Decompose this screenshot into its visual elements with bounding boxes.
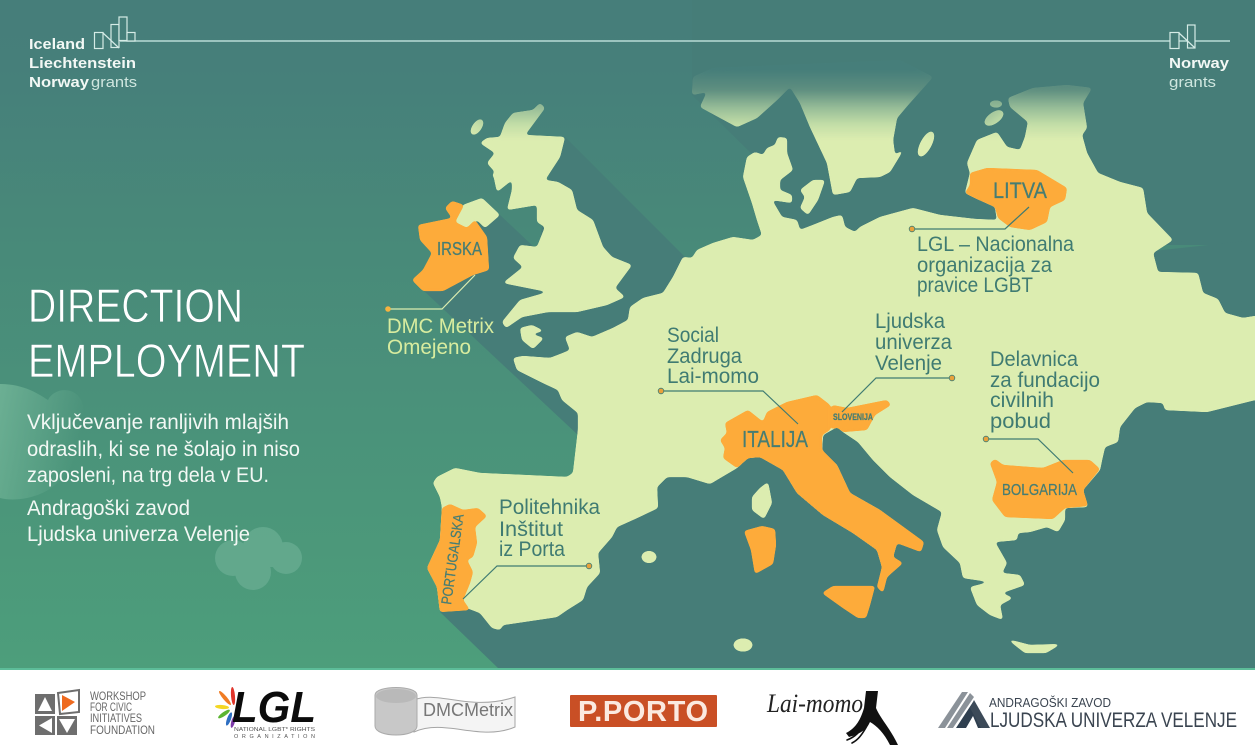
callout: Social Zadruga Lai-momo: Zadruga: [667, 345, 742, 368]
description text: odraslih, ki se ne šolajo in niso: [27, 438, 300, 461]
title: EMPLOYMENT: [28, 334, 305, 387]
description text: Andragoški zavod: [27, 497, 190, 520]
logo: Andragoski zavod Ljudska univerza Velenje: ANDRAGOŠKI ZAVOD: [989, 695, 1111, 710]
callout: Delavnica za fundacijo civilnih pobud: za fundacijo: [990, 369, 1100, 392]
map: Europe land: [427, 60, 1255, 653]
logo: Iceland Liechtenstein Norway grants: Iceland: [29, 36, 85, 53]
callout: LGL: organizacija za: [917, 254, 1052, 277]
logo: Andragoski zavod Ljudska univerza Velenje: [938, 692, 1237, 732]
callout: Ljudska univerza Velenje: Ljudska: [875, 310, 945, 333]
logo: DMCMetrix: DMCMetrix: [423, 700, 513, 720]
title: DIRECTION: [28, 279, 243, 332]
Italy: [720, 395, 924, 593]
country labels: ITALIJA: [742, 426, 809, 452]
callout: Politehnika: Politehnika: [499, 496, 600, 519]
mainland Europe: [427, 85, 1255, 630]
logo: Workshop for Civic Initiatives Foundation: [35, 689, 155, 737]
logo: LGL: LGL: [232, 683, 316, 732]
description text: [27, 411, 300, 546]
Sardinia: [744, 526, 776, 574]
Scandinavia: [692, 60, 933, 195]
callout: LGL: pravice LGBT: [917, 274, 1033, 297]
title: [28, 279, 305, 387]
footer strip: [0, 668, 1255, 745]
callout: Social Zadruga Lai-momo: Social: [667, 324, 719, 347]
logo: Workshop for Civic Initiatives Foundation: INITIATIVES: [90, 711, 142, 725]
description text: Vključevanje ranljivih mlajših: [27, 411, 289, 434]
logo: LGL: NATIONAL LGBT* RIGHTS: [234, 727, 315, 733]
Malta: [734, 638, 752, 652]
logo: Workshop for Civic Initiatives Foundation: WORKSHOP: [90, 689, 146, 703]
callout: DMC Metrix: DMC Metrix: [387, 315, 494, 338]
header rule: [120, 40, 1230, 42]
highlighted countries: [412, 168, 1100, 618]
Northern Ireland: [455, 198, 500, 228]
callout: Ljudska univerza Velenje: Velenje: [875, 352, 942, 375]
callout: Ljudska univerza Velenje: [842, 310, 955, 412]
Great Britain: [480, 103, 632, 328]
country labels: PORTUGALSKA: [439, 513, 468, 606]
callout: DMC Metrix: [385, 275, 494, 359]
logo: Workshop for Civic Initiatives Foundation: FOR CIVIC: [90, 700, 132, 714]
Crete: [1007, 639, 1061, 653]
Corsica: [752, 482, 772, 519]
callout: Delavnica za fundacijo civilnih pobud: [983, 348, 1100, 473]
decorative clouds: [0, 384, 302, 590]
callout: DMC Metrix: Omejeno: [387, 336, 471, 359]
callout: Politehnika: iz Porta: [499, 538, 565, 561]
callout: Politehnika: Inštitut: [499, 518, 563, 541]
Portugal: [427, 504, 487, 612]
description text: zaposleni, na trg dela v EU.: [27, 464, 269, 487]
logo: Iceland Liechtenstein Norway grants: Liechtenstein: [29, 55, 136, 72]
callout: Delavnica za fundacijo civilnih pobud: pobud: [990, 410, 1051, 433]
logo: Iceland Liechtenstein Norway grants: grants: [91, 74, 137, 91]
description text: Ljudska univerza Velenje: [27, 523, 250, 546]
logo: Norway grants: [1169, 25, 1230, 91]
logo: Norway grants: grants: [1169, 74, 1216, 91]
Zealand: [800, 180, 825, 215]
logo: Iceland Liechtenstein Norway grants: Norway: [29, 74, 90, 91]
callout: Politehnika: [463, 496, 600, 599]
callout: Delavnica za fundacijo civilnih pobud: civilnih: [990, 389, 1054, 412]
sea shadows: [423, 0, 1255, 668]
Gotland and Baltic islands: [915, 129, 937, 159]
logo: Lai-momo: [766, 689, 898, 745]
callout: LGL: LGL – Nacionalna: [917, 233, 1074, 256]
Sicily: [822, 586, 875, 618]
logo: LGL: [215, 683, 316, 740]
logo: Workshop for Civic Initiatives Foundation: FOUNDATION: [90, 723, 155, 737]
logo: Iceland Liechtenstein Norway grants: [29, 17, 137, 91]
country labels: BOLGARIJA: [1002, 482, 1077, 499]
logo: P.PORTO: P.PORTO: [578, 696, 708, 728]
callout: Social Zadruga Lai-momo: Lai-momo: [667, 365, 759, 388]
Ireland: [412, 201, 489, 291]
logo: LGL: ORGANIZATION: [234, 734, 315, 740]
callout: LGL: [909, 207, 1074, 297]
Outer Hebrides: [468, 117, 486, 137]
country labels: [437, 178, 1077, 606]
country labels: LITVA: [993, 178, 1047, 203]
logo: Norway grants: Norway: [1169, 55, 1230, 72]
Balearic island: [642, 551, 656, 563]
logo: Lai-momo: Lai-momo: [766, 689, 863, 718]
callout: Delavnica za fundacijo civilnih pobud: Delavnica: [990, 348, 1078, 371]
Bulgaria: [990, 459, 1100, 519]
callout: Ljudska univerza Velenje: univerza: [875, 331, 952, 354]
Channel Islands: [520, 325, 544, 349]
Slovenia: [832, 400, 891, 432]
country labels: IRSKA: [437, 239, 482, 259]
country labels: SLOVENIJA: [833, 412, 873, 423]
Lithuania: [965, 168, 1067, 230]
logo: DMCMetrix: [375, 688, 515, 735]
callout: Social Zadruga Lai-momo: [658, 324, 798, 424]
